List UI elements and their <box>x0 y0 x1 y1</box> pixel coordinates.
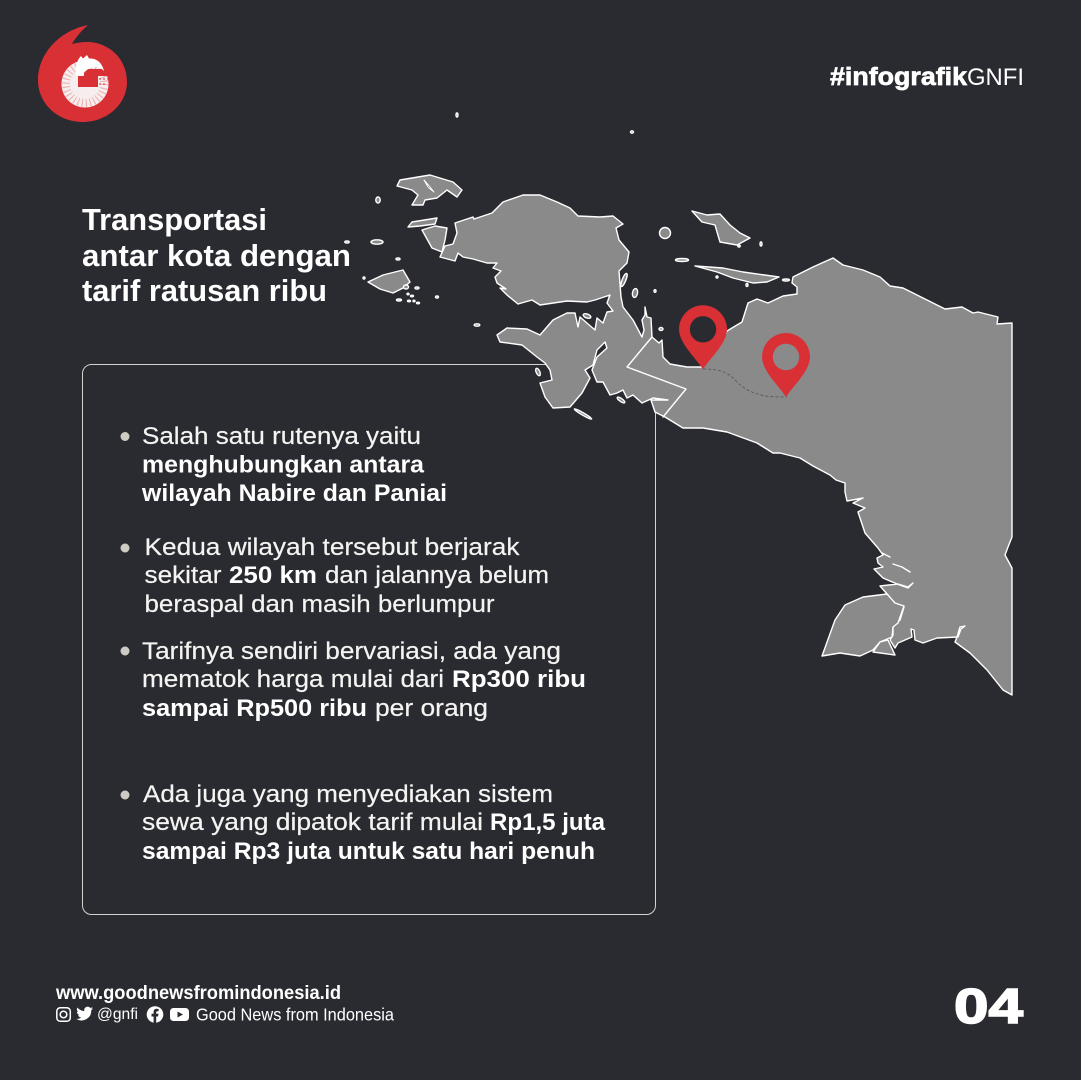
bullet 2: 250 km <box>229 562 317 589</box>
panel: text box outline <box>82 364 656 914</box>
title <box>82 202 351 308</box>
bullet 3: per orang <box>375 695 488 722</box>
map: Numfor <box>660 228 670 238</box>
bullet 3 <box>120 638 586 722</box>
icon: instagram <box>57 1008 70 1021</box>
map: Dolak island <box>822 594 904 656</box>
icon: facebook <box>147 1006 163 1023</box>
map: Yapen <box>695 266 779 283</box>
social name: Good News from Indonesia <box>196 1004 394 1024</box>
bullet 1: wilayah Nabire dan Paniai <box>141 480 447 507</box>
bullet 1: menghubungkan antara <box>142 452 424 478</box>
footer: website and social handles <box>55 983 394 1024</box>
title: Transportasi <box>82 202 267 237</box>
bullet 4 <box>120 781 605 865</box>
bullet 3: sampai Rp500 ribu <box>142 695 367 722</box>
bullet 4: Ada juga yang menyediakan sistem <box>143 781 553 808</box>
hashtag: #infografik <box>830 63 967 91</box>
hashtag: GNFI <box>967 64 1024 91</box>
map: Biak <box>692 211 750 245</box>
icon: map pin Nabire <box>679 305 727 369</box>
bullet 2: dan jalannya belum <box>325 562 549 589</box>
title: antar kota dengan <box>82 238 351 273</box>
handle: @gnfi <box>97 1006 138 1023</box>
bullet 3: mematok harga mulai dari <box>142 666 444 693</box>
map: Misool <box>368 270 410 293</box>
route: dashed line between Nabire and Paniai <box>703 369 787 397</box>
page number: 04 <box>954 980 1023 1034</box>
bullet 4: Rp1,5 juta <box>490 809 605 836</box>
icon: twitter <box>76 1007 93 1020</box>
website url: www.goodnewsfromindonesia.id <box>55 983 341 1004</box>
logo: GNFI red swirl with garuda <box>38 25 127 122</box>
icon: youtube <box>170 1008 189 1021</box>
map: mainland <box>440 195 1012 695</box>
map: Waigeo <box>397 175 462 205</box>
icon: map pin Paniai <box>762 333 810 397</box>
hashtag <box>830 63 1024 91</box>
bullet 3: Tarifnya sendiri bervariasi, ada yang <box>142 638 561 665</box>
bullet 2: beraspal dan masih berlumpur <box>144 591 494 618</box>
bullet 3: Rp300 ribu <box>452 666 586 693</box>
bullet 1 <box>120 423 447 507</box>
bullet 2 <box>120 534 549 618</box>
map: regional boundary <box>627 337 686 417</box>
bullet 4: sewa yang dipatok tarif mulai <box>142 809 483 836</box>
bullet 2: Kedua wilayah tersebut berjarak <box>144 534 520 561</box>
map: inner channels <box>882 553 910 572</box>
map: Salawati <box>422 226 447 252</box>
bullet 4: sampai Rp3 juta untuk satu hari penuh <box>142 838 595 865</box>
bullet 2: sekitar <box>144 562 222 589</box>
map: Batanta <box>408 218 437 227</box>
map: offshore islets <box>345 113 790 420</box>
bullet 1: Salah satu rutenya yaitu <box>142 423 421 450</box>
map: Papua <box>345 113 1012 695</box>
title: tarif ratusan ribu <box>82 273 327 308</box>
map: small south island <box>873 640 895 655</box>
